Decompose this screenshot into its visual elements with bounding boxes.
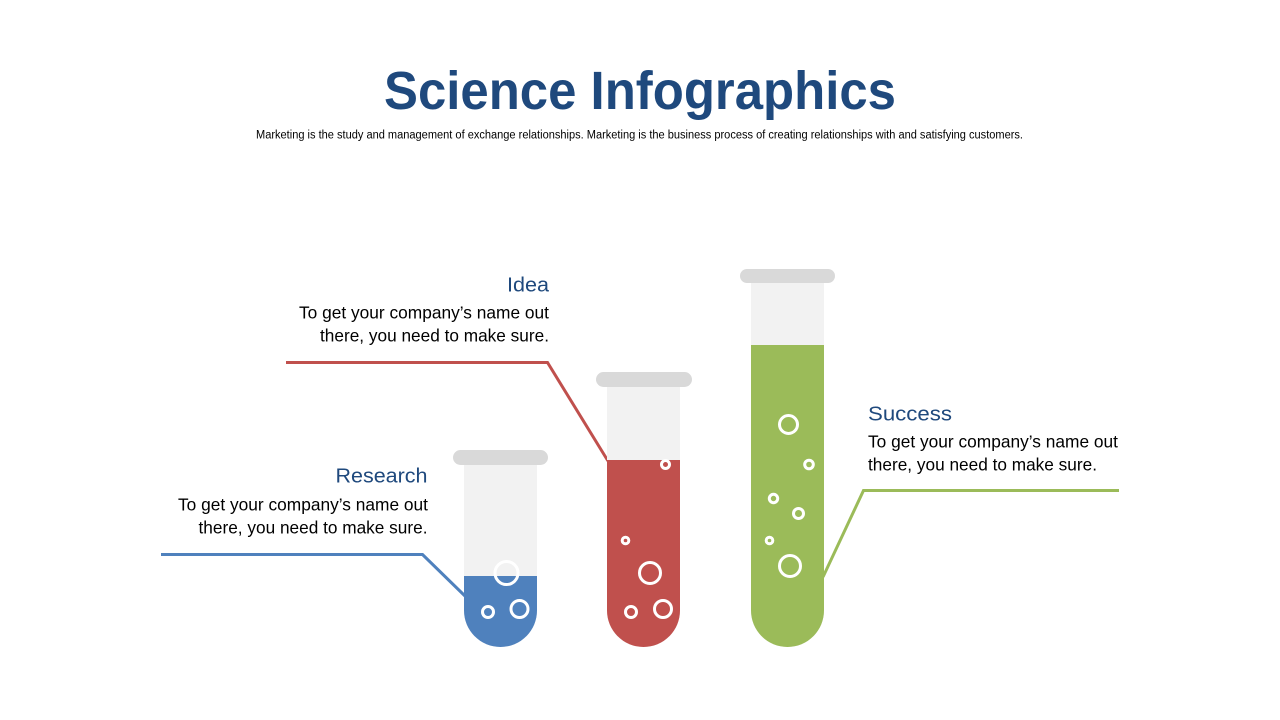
description: research: To get your company’s name out (178, 494, 428, 514)
description: success (868, 432, 1118, 474)
description: success: To get your company’s name out (868, 432, 1118, 452)
blue liquid (464, 576, 537, 647)
text block: success (868, 404, 1118, 474)
description: research: there, you need to make sure. (198, 518, 428, 538)
red liquid (607, 460, 680, 647)
tube cap (740, 269, 835, 283)
green liquid (751, 345, 824, 647)
heading: research: Research (336, 466, 428, 488)
tube glass (607, 386, 680, 647)
text block: idea (299, 274, 550, 346)
description: idea: there, you need to make sure. (320, 326, 549, 346)
subtitle: Marketing is the study and management of exchange relationships. Marketing is the business process of creating relationships with and satisfying customers. (256, 130, 1023, 142)
title: Science Infographics (384, 61, 896, 121)
tube cap (453, 450, 548, 465)
bubbles (766, 416, 813, 576)
tube cap (596, 372, 692, 387)
panel: idea test tube (596, 372, 692, 647)
description: idea (299, 302, 549, 346)
heading: success: Success (868, 404, 952, 426)
panel: research test tube (453, 450, 548, 647)
description: idea: To get your company’s name out (299, 302, 549, 322)
bubbles (482, 562, 528, 618)
tube glass (751, 282, 824, 647)
description: research (178, 494, 428, 538)
text block: research (178, 466, 428, 538)
description: success: there, you need to make sure. (868, 454, 1097, 474)
panel: success connector line (823, 490, 1119, 577)
heading: idea: Idea (507, 274, 550, 296)
panel: success test tube (740, 269, 835, 647)
bubbles (622, 460, 672, 618)
tube glass (464, 464, 537, 647)
panel: research connector line (161, 554, 465, 596)
panel: idea connector line (286, 362, 608, 461)
